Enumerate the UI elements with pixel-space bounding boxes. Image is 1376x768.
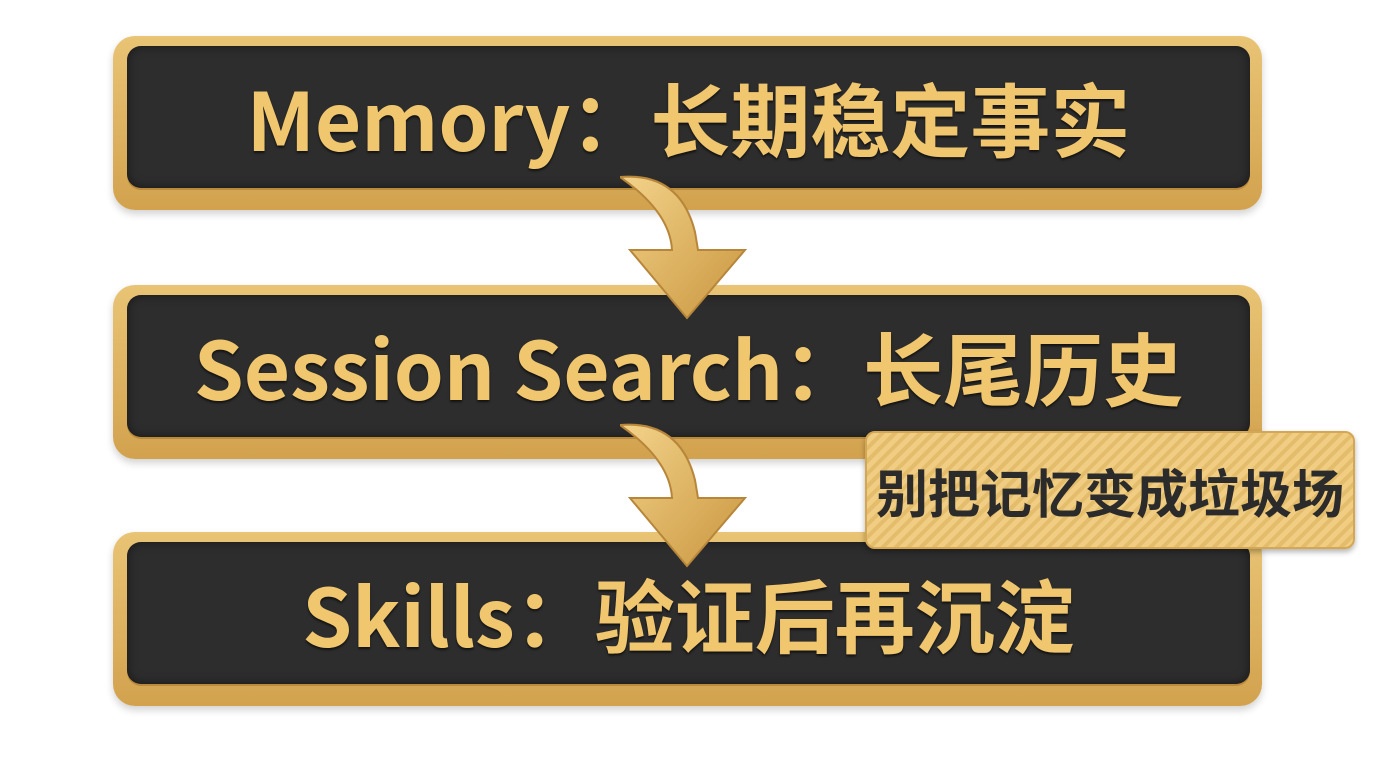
panel: session search (113, 285, 1262, 459)
arrow: memory to session (620, 176, 748, 320)
callout: warning: 别把记忆变成垃圾场 (876, 452, 1344, 528)
callout: warning (865, 431, 1355, 549)
panel: memory (113, 36, 1262, 210)
heading: session search: Session Search：长尾历史 (194, 308, 1183, 424)
heading: skills: Skills：验证后再沉淀 (302, 555, 1075, 671)
panel: skills (113, 532, 1262, 706)
arrow: session to skills (620, 424, 748, 568)
heading: memory: Memory：长期稳定事实 (247, 59, 1130, 175)
